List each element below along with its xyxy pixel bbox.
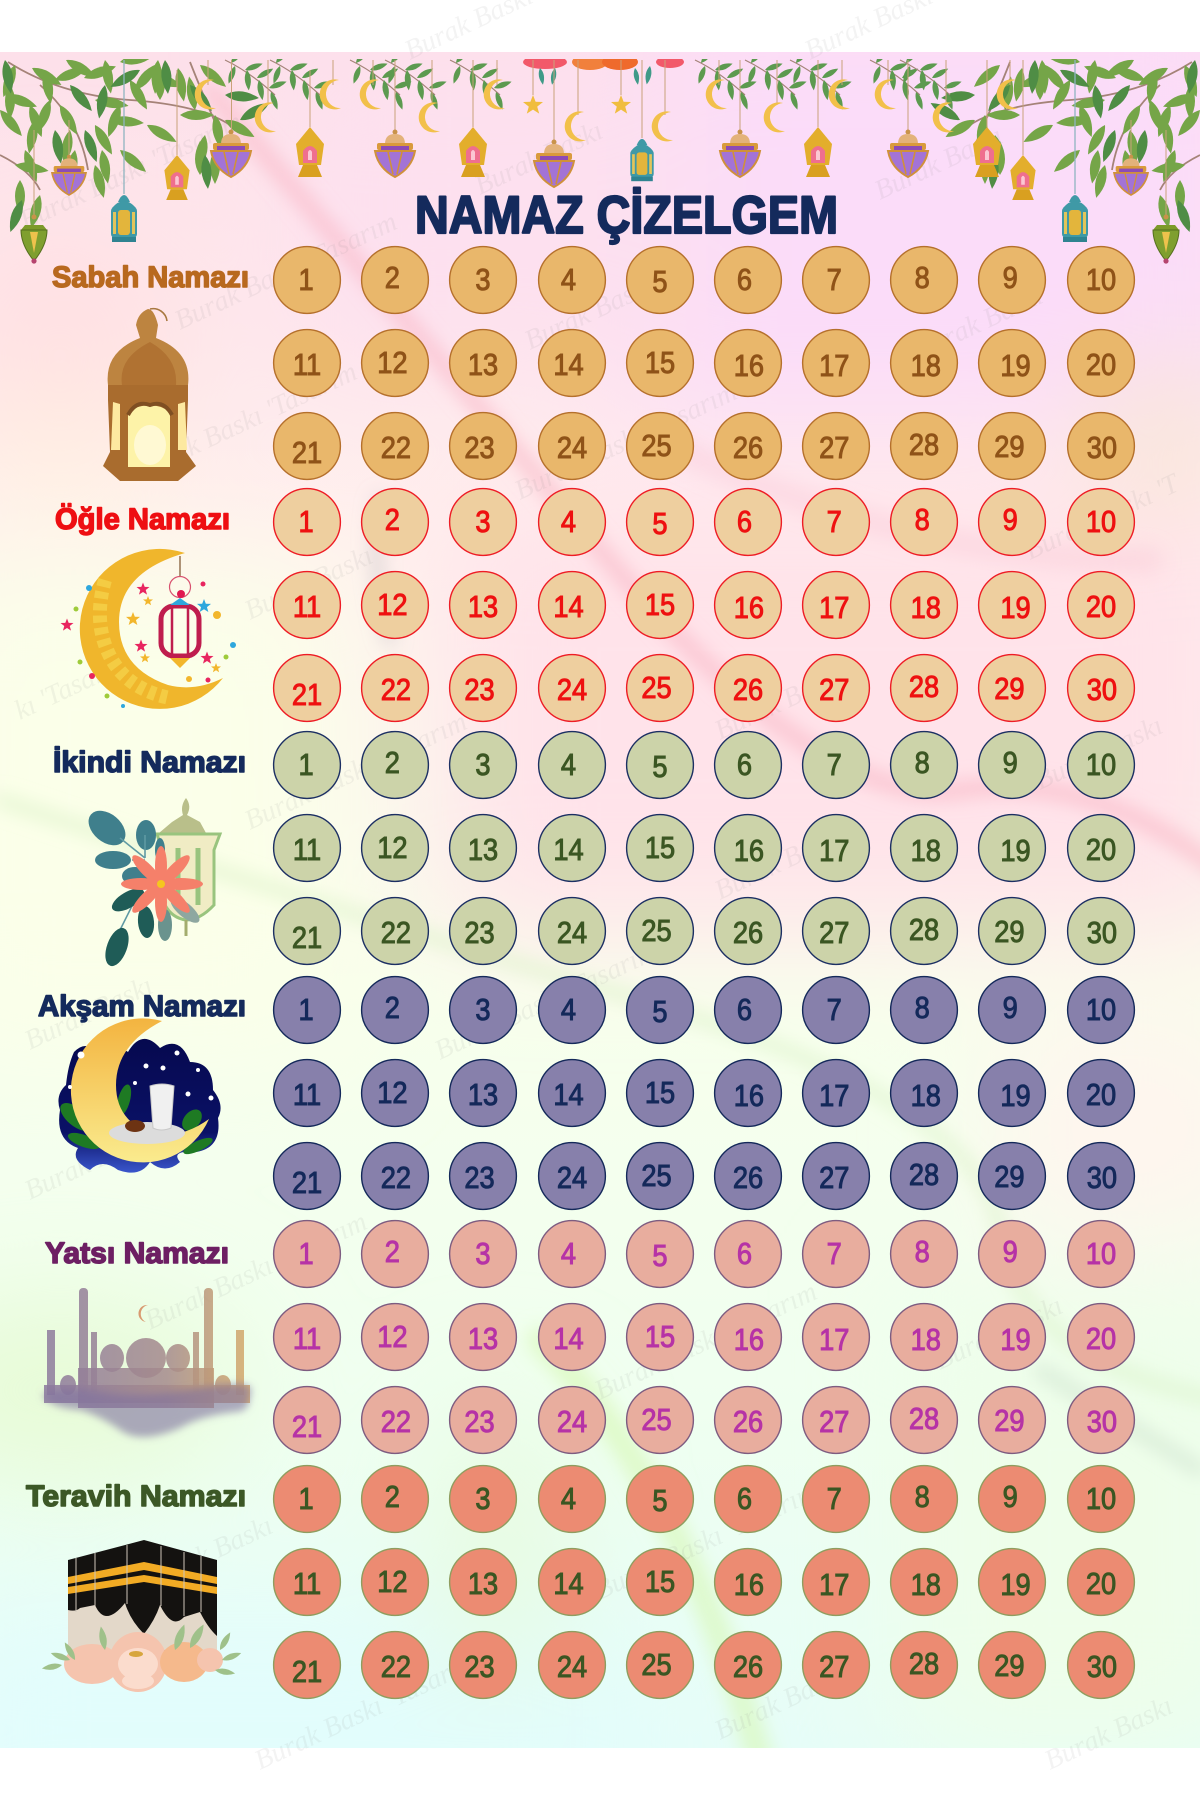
crescents and stars — [195, 79, 1018, 141]
icon: brown lantern — [103, 309, 196, 481]
number grid: İkindi: 9 — [1003, 746, 1018, 780]
number grid: Öğle: 12 — [377, 588, 408, 622]
number grid: Yatsı: 6 — [737, 1237, 752, 1271]
number grid: Sabah: 15 — [645, 346, 675, 380]
number grid: Sabah — [274, 247, 1134, 479]
number grid: İkindi: 28 — [909, 913, 939, 947]
heading: Öğle Namazı: Öğle Namazı — [55, 503, 230, 536]
number grid: Öğle: 11 — [293, 590, 321, 624]
number grid: Akşam: 24 — [557, 1161, 587, 1195]
number grid: Yatsı: 26 — [733, 1405, 763, 1439]
number grid: Öğle: 18 — [911, 591, 941, 625]
lanterns — [21, 127, 1179, 264]
watermark text: Burak Baskı — [520, 270, 658, 356]
number grid: Teravih: 20 — [1086, 1567, 1116, 1601]
number grid: Teravih: 30 — [1087, 1650, 1117, 1684]
number grid: Sabah: 8 — [915, 261, 930, 295]
number grid: Akşam: 10 — [1086, 993, 1116, 1027]
number grid: Öğle: 24 — [557, 673, 587, 707]
number grid: Sabah: 14 — [553, 348, 584, 382]
heading: İkindi Namazı: İkindi Namazı — [53, 746, 246, 779]
number grid: Öğle: 4 — [561, 505, 576, 539]
number grid: İkindi: 24 — [557, 916, 587, 950]
number grid: İkindi: 11 — [293, 833, 321, 867]
number grid: Yatsı: 9 — [1003, 1235, 1018, 1269]
number grid: Akşam: 27 — [819, 1161, 849, 1195]
number grid: Öğle: 21 — [292, 678, 322, 712]
number grid: Akşam: 17 — [819, 1079, 849, 1113]
number grid: İkindi: 8 — [915, 746, 930, 780]
number grid: Akşam: 15 — [645, 1076, 675, 1110]
number grid: Teravih: 18 — [911, 1568, 941, 1602]
number grid: Yatsı: 28 — [909, 1402, 939, 1436]
number grid: İkindi: 17 — [819, 834, 849, 868]
number grid: Öğle: 27 — [819, 673, 849, 707]
panel: Sabah Namazı — [52, 247, 1134, 481]
number grid: Teravih: 14 — [553, 1567, 584, 1601]
number grid: Akşam: 16 — [734, 1079, 764, 1113]
number grid: Teravih: 29 — [994, 1649, 1025, 1683]
number grid: Yatsı: 2 — [385, 1235, 400, 1269]
icon: golden crescent with lantern — [60, 549, 236, 709]
watermark text: Burak Baskı 'T — [1020, 467, 1186, 566]
heading: Akşam Namazı: Akşam Namazı — [38, 990, 246, 1023]
number grid: Akşam: 26 — [733, 1161, 763, 1195]
number grid: İkindi: 15 — [645, 831, 675, 865]
right leafy branch — [928, 51, 1200, 234]
number grid: Sabah: 2 — [385, 261, 400, 295]
watermark text: Burak Baskı 'Tasarım — [430, 936, 662, 1066]
number grid: Sabah: 21 — [292, 436, 322, 470]
number grid: Akşam: 18 — [911, 1079, 941, 1113]
watermark text: Burak Baskı — [20, 1120, 158, 1206]
watermark text: Burak Baskı — [1030, 710, 1168, 796]
number grid: İkindi: 29 — [994, 915, 1025, 949]
number grid: İkindi: 26 — [733, 916, 763, 950]
number grid: İkindi: 7 — [827, 748, 842, 782]
number grid: Öğle: 22 — [381, 673, 411, 707]
panel: İkindi Namazı — [53, 732, 1134, 969]
number grid: Akşam — [274, 977, 1134, 1209]
number grid: Öğle: 30 — [1087, 673, 1117, 707]
number grid: İkindi: 12 — [377, 831, 408, 865]
number grid: Akşam: 4 — [561, 993, 576, 1027]
number grid: Yatsı: 5 — [652, 1239, 668, 1273]
number grid: Sabah: 11 — [293, 348, 321, 382]
number grid: Yatsı: 14 — [553, 1322, 584, 1356]
number grid: Teravih: 28 — [909, 1647, 939, 1681]
number grid: Akşam: 19 — [1000, 1079, 1031, 1113]
number grid: İkindi: 25 — [641, 914, 672, 948]
number grid: Akşam: 12 — [377, 1076, 408, 1110]
number grid: İkindi: 19 — [1000, 834, 1031, 868]
number grid: Öğle: 7 — [827, 505, 842, 539]
number grid: Teravih: 27 — [819, 1650, 849, 1684]
number grid: Teravih: 2 — [385, 1480, 400, 1514]
number grid: Akşam: 5 — [652, 995, 668, 1029]
number grid: Teravih: 7 — [827, 1482, 842, 1516]
number grid: Öğle: 10 — [1086, 505, 1116, 539]
number grid: Öğle: 1 — [299, 505, 314, 539]
watermark text: Burak Baskı — [870, 120, 1008, 206]
number grid: Akşam: 1 — [299, 993, 314, 1027]
number grid: Teravih: 26 — [733, 1650, 763, 1684]
number grid: Yatsı: 1 — [299, 1237, 314, 1271]
icon: Kaaba with flowers — [41, 1540, 242, 1692]
number grid: Sabah: 13 — [468, 348, 498, 382]
left leafy branch — [0, 51, 272, 234]
number grid: Teravih: 21 — [292, 1655, 322, 1689]
number grid: Yatsı: 3 — [475, 1237, 491, 1271]
number grid: Sabah: 4 — [561, 263, 576, 297]
watermark text: Burak Baskı — [1040, 1690, 1178, 1776]
number grid: Yatsı: 29 — [994, 1404, 1025, 1438]
heading: Teravih Namazı: Teravih Namazı — [26, 1480, 246, 1513]
panel: Öğle Namazı — [55, 489, 1134, 721]
number grid: Öğle: 6 — [737, 505, 752, 539]
watermark text: Burak Baskı 'Tasarım — [240, 706, 472, 836]
number grid: Öğle: 20 — [1086, 590, 1116, 624]
watermark text: Burak Baskı — [910, 280, 1048, 366]
number grid: Sabah: 30 — [1087, 431, 1117, 465]
number grid: Akşam: 21 — [292, 1166, 322, 1200]
number grid: Yatsı: 4 — [561, 1237, 576, 1271]
watermark text: kı 'Tasarım — [10, 646, 135, 726]
watermark text: Burak Baskı — [710, 1660, 848, 1746]
number grid: Öğle: 19 — [1000, 591, 1031, 625]
number grid: Teravih: 16 — [734, 1568, 764, 1602]
number grid: Sabah: 28 — [909, 428, 939, 462]
number grid: Akşam: 29 — [994, 1160, 1025, 1194]
number grid: Akşam: 14 — [553, 1078, 584, 1112]
number grid: Yatsı — [274, 1221, 1134, 1453]
number grid: Akşam: 7 — [827, 993, 842, 1027]
number grid: Teravih: 15 — [645, 1565, 675, 1599]
number grid: İkindi: 20 — [1086, 833, 1116, 867]
number grid: İkindi: 14 — [553, 833, 584, 867]
panel: Teravih Namazı — [26, 1466, 1134, 1698]
number grid: İkindi: 23 — [464, 916, 495, 950]
number grid: İkindi: 30 — [1087, 916, 1117, 950]
watermark text: Burak Baskı 'Tasarım — [590, 1476, 822, 1606]
number grid: Yatsı: 16 — [734, 1323, 764, 1357]
number grid: Yatsı: 17 — [819, 1323, 849, 1357]
number grid: Sabah: 20 — [1086, 348, 1116, 382]
number grid: İkindi: 3 — [475, 748, 491, 782]
number grid: Akşam: 30 — [1087, 1161, 1117, 1195]
watermark text: Burak Baskı — [930, 1290, 1068, 1376]
watermark text: Burak Baskı — [710, 660, 848, 746]
number grid: Sabah: 7 — [827, 263, 842, 297]
icon: night cloud, crescent, milk and dates — [56, 1018, 221, 1173]
number grid: Akşam: 23 — [464, 1161, 495, 1195]
number grid: İkindi: 22 — [381, 916, 411, 950]
number grid: Akşam: 3 — [475, 993, 491, 1027]
watermark text: Burak Baskı — [140, 1510, 278, 1596]
number grid: Akşam: 13 — [468, 1078, 498, 1112]
number grid: Sabah: 25 — [641, 429, 672, 463]
icon: watercolour mosque silhouette — [42, 1288, 251, 1437]
number grid: Akşam: 2 — [385, 991, 400, 1025]
number grid: Yatsı: 8 — [915, 1235, 930, 1269]
number grid: Öğle: 23 — [464, 673, 495, 707]
number grid: Teravih: 22 — [381, 1650, 411, 1684]
heading: Sabah Namazı: Sabah Namazı — [52, 261, 249, 294]
number grid: Yatsı: 23 — [464, 1405, 495, 1439]
number grid: Sabah: 24 — [557, 431, 587, 465]
number grid: İkindi: 4 — [561, 748, 576, 782]
lantern strings — [34, 60, 1166, 215]
number grid: Öğle: 26 — [733, 673, 763, 707]
number grid: Teravih: 11 — [293, 1567, 321, 1601]
number grid: Akşam: 22 — [381, 1161, 411, 1195]
number grid: Yatsı: 13 — [468, 1322, 498, 1356]
number grid: Teravih: 8 — [915, 1480, 930, 1514]
number grid: Teravih: 6 — [737, 1482, 752, 1516]
number grid: Teravih: 23 — [464, 1650, 495, 1684]
number grid: Teravih: 12 — [377, 1565, 408, 1599]
number grid: Sabah: 16 — [734, 349, 764, 383]
number grid: Sabah: 26 — [733, 431, 763, 465]
number grid: Öğle: 15 — [645, 588, 675, 622]
number grid: Öğle: 25 — [641, 671, 672, 705]
number grid: Yatsı: 25 — [641, 1403, 672, 1437]
number grid: İkindi: 10 — [1086, 748, 1116, 782]
number grid: Öğle: 16 — [734, 591, 764, 625]
number grid: Teravih: 10 — [1086, 1482, 1116, 1516]
number grid: Öğle: 28 — [909, 670, 939, 704]
number grid: Sabah: 19 — [1000, 349, 1031, 383]
number grid: Öğle: 14 — [553, 590, 584, 624]
number grid: Öğle: 9 — [1003, 503, 1018, 537]
number grid: Teravih: 9 — [1003, 1480, 1018, 1514]
watermark text: Burak Baskı — [470, 115, 608, 201]
watermark text: Burak Baskı — [20, 970, 158, 1056]
number grid: Yatsı: 30 — [1087, 1405, 1117, 1439]
number grid: İkindi: 2 — [385, 746, 400, 780]
number grid: İkindi — [274, 732, 1134, 964]
number grid: Akşam: 28 — [909, 1158, 939, 1192]
number grid: Teravih: 4 — [561, 1482, 576, 1516]
watermark text: Burak Baskı 'Tasarım — [590, 1276, 822, 1406]
number grid: Yatsı: 20 — [1086, 1322, 1116, 1356]
number grid: Teravih: 25 — [641, 1648, 672, 1682]
number grid: Akşam: 11 — [293, 1078, 321, 1112]
number grid: Yatsı: 27 — [819, 1405, 849, 1439]
number grid: Yatsı: 15 — [645, 1320, 675, 1354]
number grid: Akşam: 9 — [1003, 991, 1018, 1025]
number grid: Akşam: 6 — [737, 993, 752, 1027]
number grid: Teravih: 19 — [1000, 1568, 1031, 1602]
number grid: Teravih: 13 — [468, 1567, 498, 1601]
watermark text: Burak Baskı 'Tasarım — [170, 206, 402, 336]
number grid: Yatsı: 12 — [377, 1320, 408, 1354]
icon: green lantern with flower — [82, 798, 220, 969]
watermark text: Burak Baskı 'Tasarım — [15, 106, 247, 236]
number grid: Sabah: 27 — [819, 431, 849, 465]
number grid: Sabah: 5 — [652, 265, 668, 299]
number grid: Öğle: 29 — [994, 672, 1025, 706]
number grid: Öğle: 17 — [819, 591, 849, 625]
number grid: Yatsı: 24 — [557, 1405, 587, 1439]
number grid: Yatsı: 21 — [292, 1410, 322, 1444]
number grid: Sabah: 1 — [299, 263, 314, 297]
number grid: İkindi: 6 — [737, 748, 752, 782]
number grid: Öğle: 5 — [652, 507, 668, 541]
number grid: Teravih — [274, 1466, 1134, 1698]
number grid: Yatsı: 10 — [1086, 1237, 1116, 1271]
watermark text: Burak Baskı 'Tasarım — [510, 376, 742, 506]
number grid: Yatsı: 18 — [911, 1323, 941, 1357]
watermark text: Burak Baskı 'Tasarım — [140, 1206, 372, 1336]
number grid: İkindi: 18 — [911, 834, 941, 868]
watermark text: Burak Baskı 'Tasarım — [250, 1646, 482, 1776]
number grid: Akşam: 20 — [1086, 1078, 1116, 1112]
number grid: Teravih: 5 — [652, 1484, 668, 1518]
number grid: Sabah: 12 — [377, 346, 408, 380]
number grid: Öğle: 13 — [468, 590, 498, 624]
number grid: İkindi: 5 — [652, 750, 668, 784]
number grid: Sabah: 29 — [994, 430, 1025, 464]
watermark text: Burak Baskı — [240, 540, 378, 626]
number grid: Yatsı: 7 — [827, 1237, 842, 1271]
number grid: Öğle: 2 — [385, 503, 400, 537]
number grid: İkindi: 16 — [734, 834, 764, 868]
number grid: Sabah: 6 — [737, 263, 752, 297]
panel: Yatsı Namazı — [42, 1221, 1134, 1453]
number grid: İkindi: 13 — [468, 833, 498, 867]
number grid: Teravih: 17 — [819, 1568, 849, 1602]
number grid: Öğle: 8 — [915, 503, 930, 537]
number grid: İkindi: 1 — [299, 748, 314, 782]
number grid: Sabah: 23 — [464, 431, 495, 465]
number grid: Sabah: 3 — [475, 263, 491, 297]
number grid: Akşam: 8 — [915, 991, 930, 1025]
number grid: Öğle: 3 — [475, 505, 491, 539]
watermark text: Burak Baskı — [710, 820, 848, 906]
title: NAMAZ ÇİZELGEM — [415, 186, 838, 245]
number grid: Teravih: 3 — [475, 1482, 491, 1516]
number grid: Sabah: 17 — [819, 349, 849, 383]
number grid: Sabah: 10 — [1086, 263, 1116, 297]
number grid: Sabah: 22 — [381, 431, 411, 465]
number grid: Yatsı: 19 — [1000, 1323, 1031, 1357]
top centre flowers — [523, 59, 684, 85]
number grid: Öğle — [274, 489, 1134, 721]
panel: Akşam Namazı — [38, 977, 1134, 1209]
number grid: Yatsı: 11 — [293, 1322, 321, 1356]
number grid: Sabah: 9 — [1003, 261, 1018, 295]
number grid: Sabah: 18 — [911, 349, 941, 383]
number grid: Teravih: 24 — [557, 1650, 587, 1684]
hanging garland with lanterns and crescents — [0, 47, 1200, 264]
number grid: Akşam: 25 — [641, 1159, 672, 1193]
small top twigs — [224, 59, 962, 110]
watermark text: Burak Baskı 'Tasarım — [130, 356, 362, 486]
number grid: İkindi: 21 — [292, 921, 322, 955]
heading: Yatsı Namazı: Yatsı Namazı — [45, 1237, 229, 1270]
number grid: Yatsı: 22 — [381, 1405, 411, 1439]
number grid: İkindi: 27 — [819, 916, 849, 950]
number grid: Teravih: 1 — [299, 1482, 314, 1516]
